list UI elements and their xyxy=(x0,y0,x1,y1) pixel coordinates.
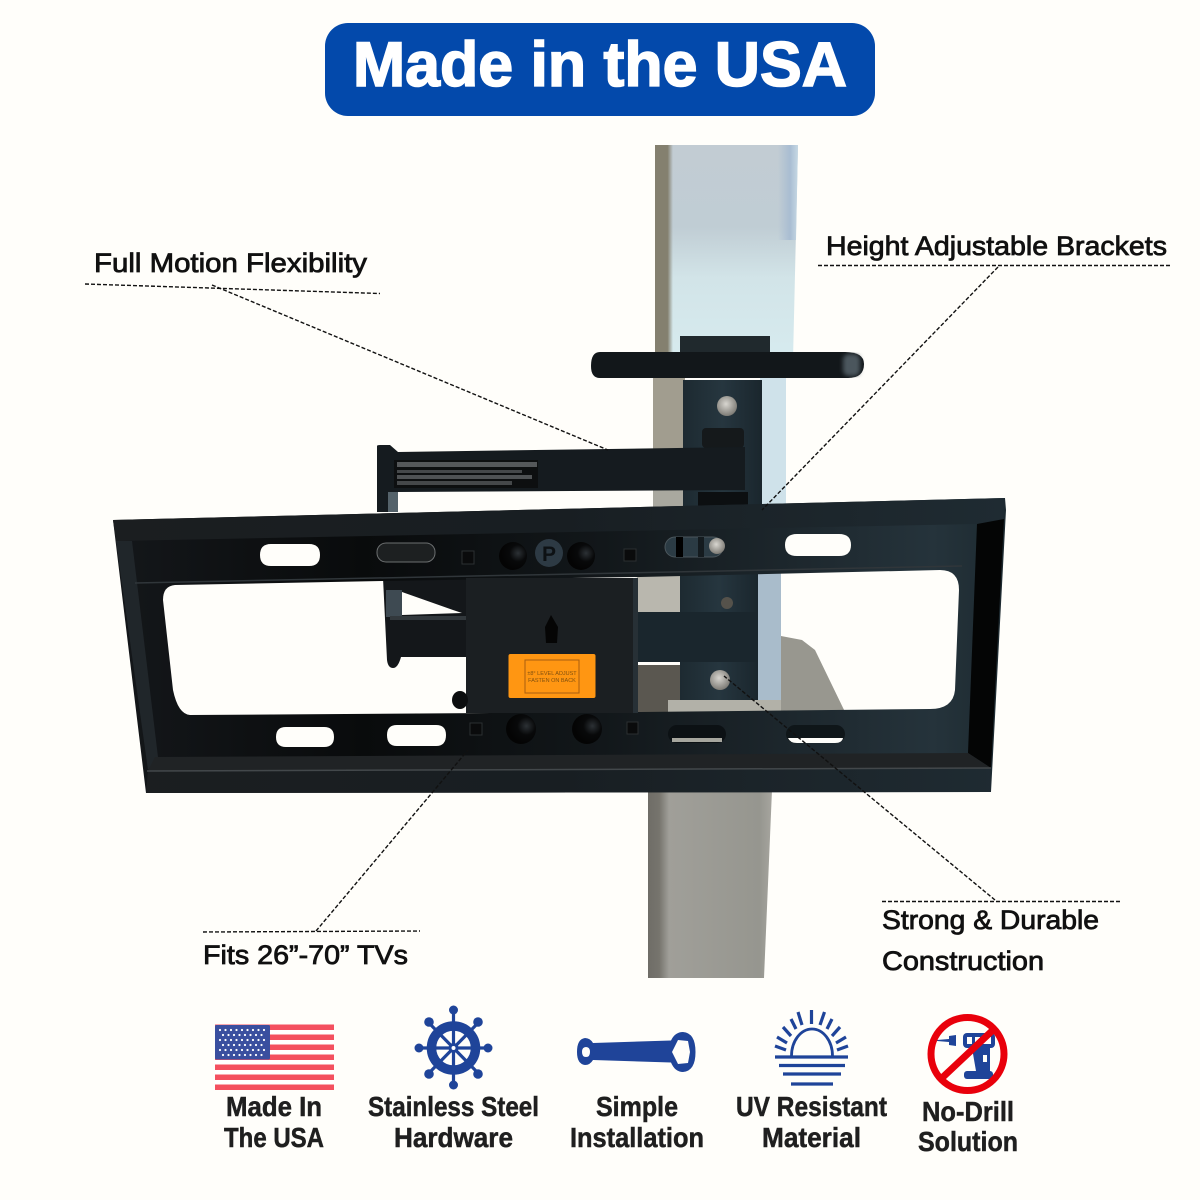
callout: Height Adjustable Brackets: Height Adjustable Brackets xyxy=(826,231,1167,261)
callout: Fits 26-70 TVs xyxy=(203,750,468,970)
orange level sticker xyxy=(508,654,596,698)
feature: UV Resistant Material xyxy=(736,1010,887,1153)
brand logo badge xyxy=(535,539,563,567)
icon: ship wheel xyxy=(414,1006,492,1090)
brand logo badge: P xyxy=(542,543,556,566)
center plate xyxy=(466,578,638,713)
feature: Stainless Steel Hardware: Hardware xyxy=(394,1122,513,1153)
bolt behind plate xyxy=(452,691,468,709)
icon: up arrow xyxy=(545,615,558,643)
title banner xyxy=(325,23,875,116)
callout: Fits 26-70 TVs: Fits 26”-70” TVs xyxy=(203,940,408,970)
feature: No-Drill Solution: No-Drill xyxy=(922,1096,1014,1127)
callout: Full Motion Flexibility: Full Motion Flexibility xyxy=(94,248,368,278)
feature: UV Resistant Material: UV Resistant xyxy=(736,1091,887,1122)
upper pole xyxy=(637,145,798,716)
feature: Made In The USA: Made In xyxy=(226,1091,322,1122)
feature: Simple Installation xyxy=(570,1032,704,1153)
feature: Made In The USA: The USA xyxy=(224,1122,324,1153)
callout: Full Motion Flexibility xyxy=(85,248,608,450)
vertical adjustable bracket xyxy=(680,380,762,700)
lower swing arm xyxy=(383,578,758,668)
title banner: Made in the USA xyxy=(353,30,847,100)
orange level sticker: FASTEN ON BACK xyxy=(528,678,576,684)
upper swing arm xyxy=(377,445,745,512)
square holes xyxy=(462,549,638,735)
wall plate frame xyxy=(113,498,1006,793)
grey base behind mount xyxy=(781,636,846,714)
lower pole xyxy=(648,790,772,978)
icon: sun over water xyxy=(775,1010,848,1084)
callout: Height Adjustable Brackets xyxy=(762,231,1172,510)
feature: UV Resistant Material: Material xyxy=(762,1122,861,1153)
feature: Stainless Steel Hardware: Stainless Steel xyxy=(368,1091,539,1122)
icon: wrench xyxy=(577,1032,696,1072)
product photo: TV mount on pole xyxy=(113,145,1006,978)
feature: Made In The USA xyxy=(215,1024,334,1153)
callout: Strong and Durable Construction xyxy=(724,676,1122,976)
feature: Stainless Steel Hardware xyxy=(368,1006,539,1153)
feature: Simple Installation: Installation xyxy=(570,1122,704,1153)
mounting slots xyxy=(377,537,845,743)
orange level sticker: ±8° LEVEL ADJUST xyxy=(527,671,577,677)
feature: No-Drill Solution: Solution xyxy=(918,1126,1018,1157)
callout: Strong and Durable Construction: Strong & Durable xyxy=(882,905,1099,935)
icon: american flag xyxy=(215,1024,334,1090)
screws xyxy=(499,542,602,744)
icon: crossed-out drill xyxy=(931,1018,1004,1090)
feature: Simple Installation: Simple xyxy=(596,1091,678,1122)
callout: Strong and Durable Construction: Construction xyxy=(882,946,1044,976)
feature: No-Drill Solution xyxy=(918,1018,1018,1157)
top bracket plate xyxy=(591,336,864,378)
